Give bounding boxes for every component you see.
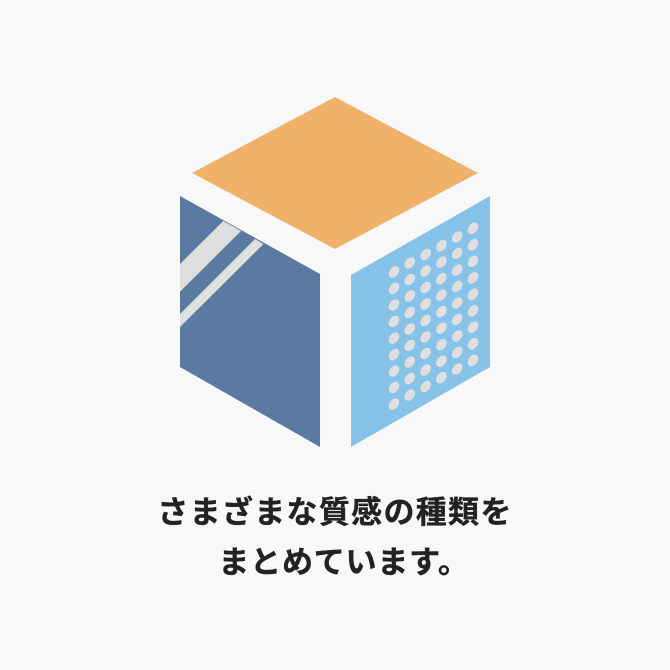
cube right face: light blue with dots: [351, 196, 490, 447]
caption text: さまざまな質感の種類を: [157, 495, 513, 530]
cube top face: orange: [192, 97, 478, 249]
cube left face: blue with stripes: [180, 196, 320, 447]
caption text: まとめています。: [218, 545, 470, 580]
caption text: [157, 495, 513, 580]
